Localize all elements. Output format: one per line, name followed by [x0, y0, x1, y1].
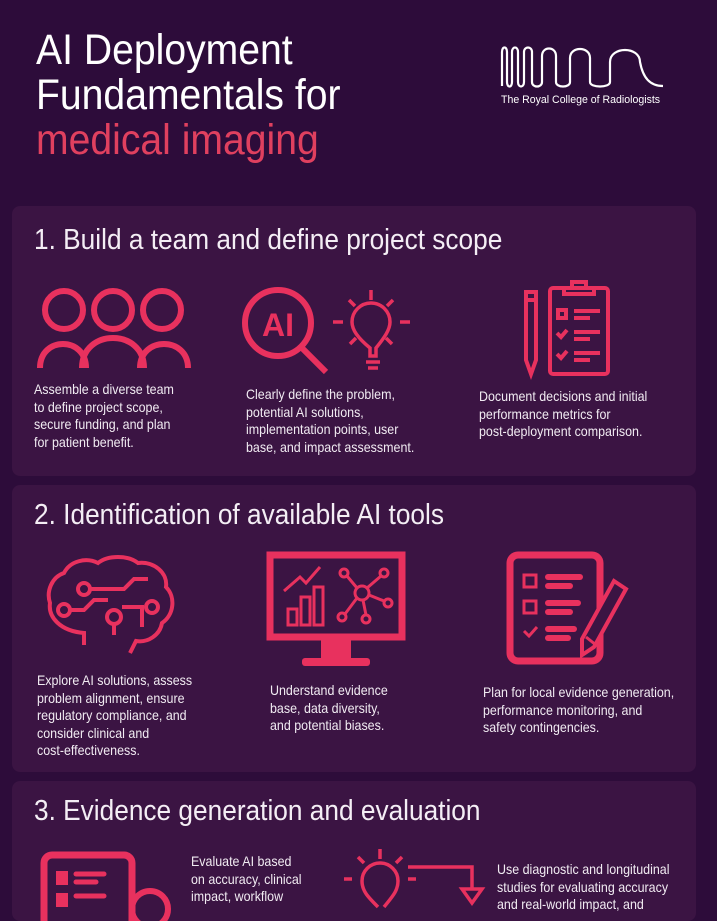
logo: The Royal College of Radiologists [501, 94, 660, 106]
title: AI Deployment [36, 26, 293, 74]
text: team [34, 381, 174, 450]
text: plan local evidence [483, 684, 674, 735]
text: evaluate AI: on accuracy, clinical [191, 870, 302, 886]
icon: brain [46, 555, 174, 654]
heading 1: 1. Build a team and define project scope [34, 224, 502, 256]
text: evidence base: Understand evidence [270, 682, 388, 698]
icon: AI magnifier and bulb [242, 287, 410, 374]
text: document decisions: post-deployment comparison. [479, 423, 642, 439]
title: medical imaging [36, 116, 319, 164]
text: plan local evidence: Plan for local evidence generation, [483, 684, 674, 700]
text: evaluate AI: Evaluate AI based [191, 853, 291, 869]
text: team: secure funding, and plan [34, 416, 170, 432]
text: explore: cost-effectiveness. [37, 742, 140, 758]
icon: monitor with chart [266, 552, 406, 666]
logo [500, 46, 663, 106]
icon: AI magnifier and bulb: AI [262, 307, 294, 343]
text: diagnostic studies: Use diagnostic and longitudinal [497, 861, 669, 877]
text: evaluate AI [191, 853, 302, 904]
icon: checklist with pencil [506, 552, 629, 664]
heading 2: 2. Identification of available AI tools [34, 499, 444, 531]
text: team: Assemble a diverse team [34, 381, 174, 397]
text: explore: problem alignment, ensure [37, 690, 185, 706]
text: explore [37, 672, 192, 758]
panel: evidence generation [12, 781, 696, 921]
text: define problem: potential AI solutions, [246, 404, 364, 420]
text: define problem: implementation points, user [246, 421, 398, 437]
text: evidence base: and potential biases. [270, 717, 384, 733]
text: plan local evidence: safety contingencies. [483, 719, 599, 735]
title: Fundamentals for [36, 71, 341, 119]
text: explore: consider clinical and [37, 724, 149, 740]
panel: build a team [12, 206, 696, 476]
icon: team [37, 288, 191, 368]
text: define problem: Clearly define the problem, [246, 386, 395, 402]
text: team: to define project scope, [34, 398, 163, 414]
heading 3: 3. Evidence generation and evaluation [34, 795, 481, 827]
title [36, 26, 341, 164]
icon: report [40, 852, 171, 921]
text: explore: Explore AI solutions, assess [37, 672, 192, 688]
text: define problem [246, 386, 414, 455]
icon: clipboard [524, 280, 610, 380]
panel: identification of AI tools [12, 485, 696, 772]
text: document decisions: performance metrics for [479, 406, 611, 422]
text: diagnostic studies: studies for evaluating accuracy [497, 878, 668, 894]
text: evidence base [270, 682, 388, 733]
icon: bulb with arrow [344, 849, 486, 908]
text: define problem: base, and impact assessment. [246, 438, 414, 454]
text: evidence base: base, data diversity, [270, 700, 380, 716]
text: evaluate AI: impact, workflow [191, 888, 283, 904]
text: diagnostic studies: and real-world impact, and [497, 896, 644, 912]
text: diagnostic studies [497, 861, 669, 912]
text: document decisions [479, 388, 647, 439]
text: document decisions: Document decisions and initial [479, 388, 647, 404]
text: team: for patient benefit. [34, 434, 134, 450]
text: plan local evidence: performance monitoring, and [483, 702, 642, 718]
text: explore: regulatory compliance, and [37, 707, 187, 723]
